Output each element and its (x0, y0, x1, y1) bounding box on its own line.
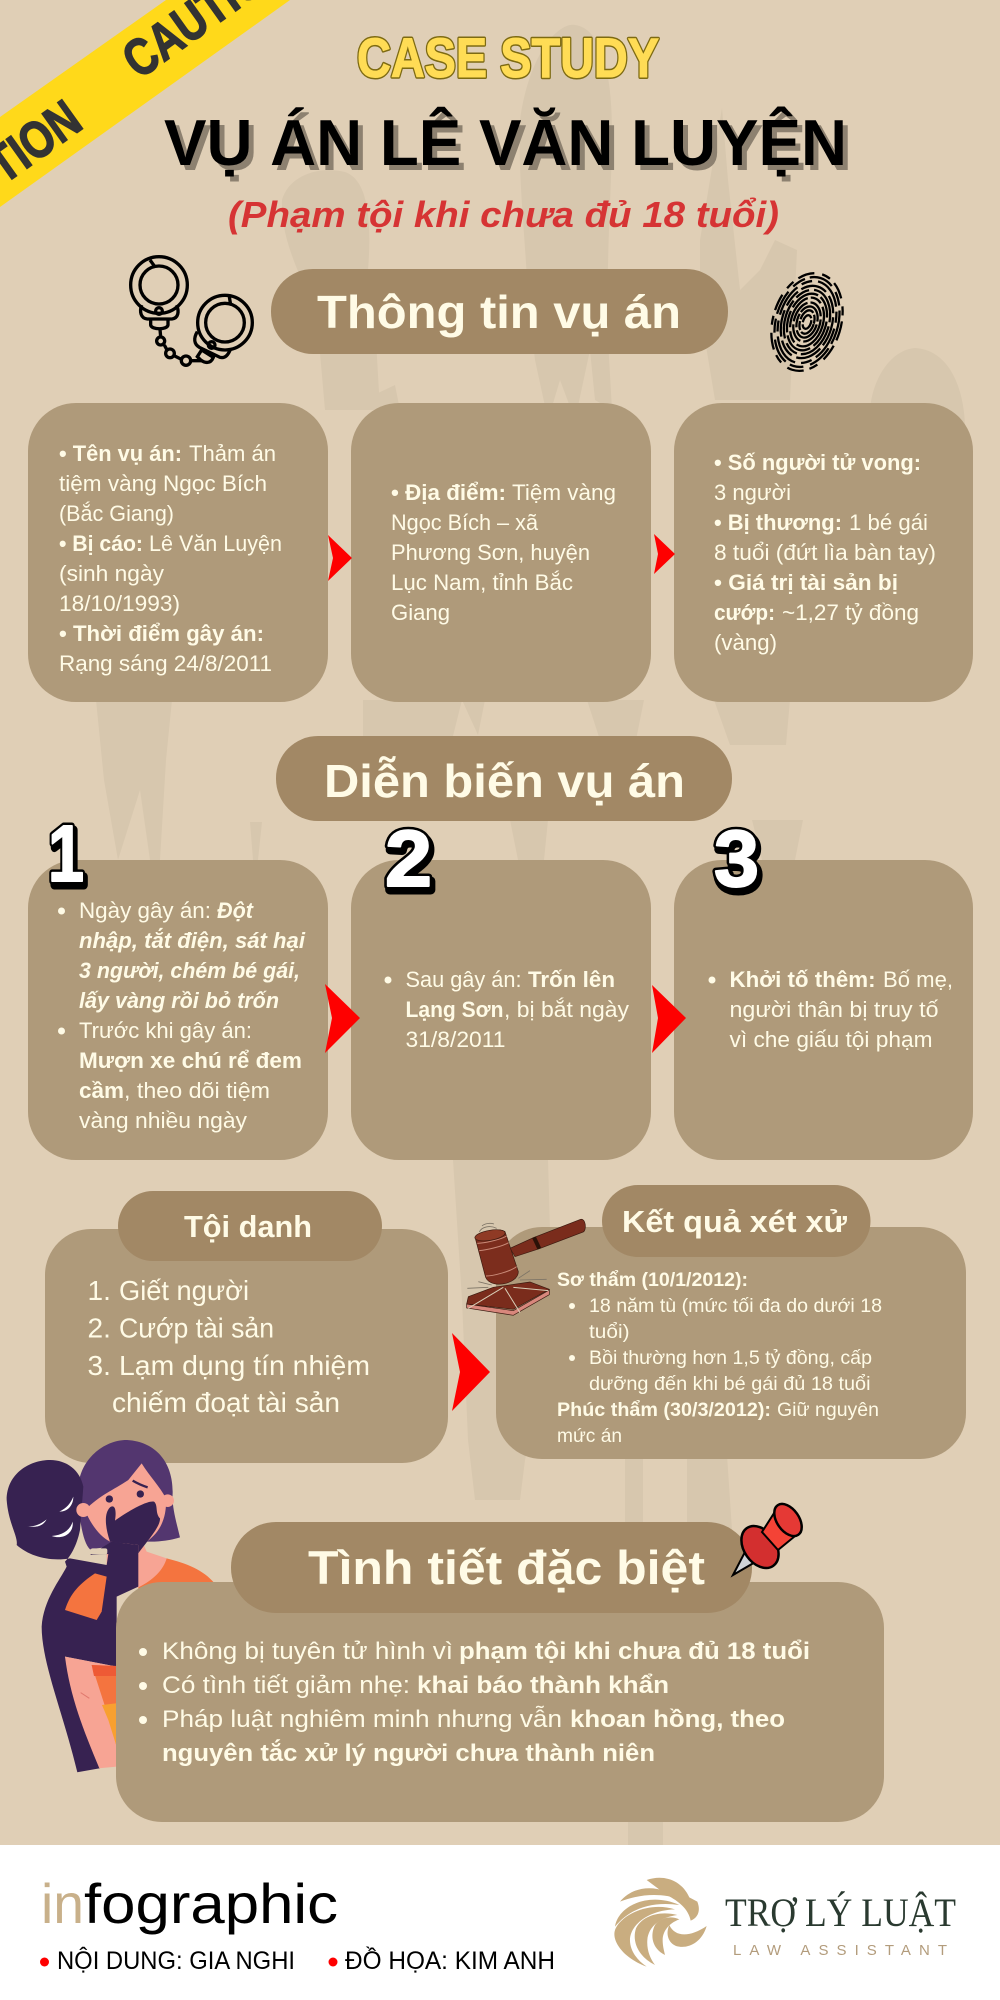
heading and panel: special circumstances: Có tình tiết giảm nhẹ: (162, 1672, 410, 1699)
panel: casualties and property: cướp: (714, 600, 775, 625)
arrow: step 2 to 3 (652, 985, 686, 1053)
footer band (0, 1845, 1000, 2000)
panel: step 1: lấy vàng rồi bỏ trốn (79, 988, 279, 1013)
panel: casualties and property: 1 bé gái (849, 510, 928, 535)
panel: step 3: vì che giấu tội phạm (730, 1027, 932, 1052)
footer: infographic wordmark: fographic (84, 1872, 338, 1935)
logo: wordmark: TRỢ LÝ LUẬT (725, 1890, 956, 1935)
panel: case name, defendant, time: Thảm án (189, 441, 276, 466)
heading and panel: special circumstances: khoan hồng, theo (570, 1706, 785, 1733)
step number 3: 3 (714, 814, 759, 903)
arrow: charges to verdict (452, 1333, 490, 1411)
panel: location: • Địa điểm: (391, 480, 506, 505)
panel: casualties and property: 3 người (714, 480, 791, 505)
title: case study: CASE STUDY (357, 26, 659, 89)
arrow: step 1 to 2 (325, 984, 360, 1053)
panel: verdict: Giữ nguyên (777, 1399, 879, 1421)
panel: casualties and property: 8 tuổi (đứt lìa bàn tay) (714, 540, 936, 565)
caution tape (0, 0, 301, 247)
step number 3: 3 (714, 814, 759, 903)
panel: verdict: dưỡng đến khi bé gái đủ 18 tuổi (589, 1373, 870, 1395)
logo: wordmark: LAW ASSISTANT (733, 1942, 947, 1959)
panel: case name, defendant, time: • Bị cáo: (59, 531, 143, 556)
panel: case name, defendant, time: Lê Văn Luyện (149, 531, 282, 556)
heading and panel: special circumstances: Tình tiết đặc biệt (308, 1541, 705, 1594)
panel: step 2: , bị bắt ngày (504, 997, 630, 1022)
panel: step 1: Ngày gây án: (79, 898, 211, 923)
panel: step 1: , theo dõi tiệm (124, 1078, 270, 1103)
panel: verdict (496, 1185, 966, 1459)
panel: step 3: người thân bị truy tố (730, 997, 939, 1022)
arrow: info 2 to 3 (654, 534, 675, 574)
panel: step 2: 31/8/2011 (406, 1027, 506, 1052)
footer: content credit: NỘI DUNG: GIA NGHI (57, 1946, 295, 1975)
panel: verdict: mức án (557, 1425, 622, 1447)
heading: thông tin vụ án: Thông tin vụ án (317, 286, 681, 338)
panel: charges (45, 1191, 448, 1463)
step number 2: 2 (385, 814, 432, 903)
panel: location (351, 403, 651, 702)
step number 1: 1 (48, 809, 84, 898)
footer: infographic wordmark: in (41, 1872, 84, 1935)
step number 2: 2 (385, 814, 432, 903)
icon: handcuffs (131, 257, 252, 365)
panel: step 2: Trốn lên (528, 967, 615, 992)
panel: step 1: nhập, tắt điện, sát hại (79, 928, 306, 953)
panel: case name, defendant, time: (Bắc Giang) (59, 501, 174, 526)
panel: step 1: Mượn xe chú rể đem (79, 1048, 302, 1073)
footer: design credit: ĐỒ HỌA: KIM ANH (345, 1945, 555, 1975)
panel: casualties and property: ~1,27 tỷ đồng (782, 600, 919, 625)
step number 1: 1 (48, 809, 84, 898)
title: case study: CASE STUDY (357, 26, 659, 89)
panel: case name, defendant, time: • Thời điểm gây án: (59, 621, 264, 646)
panel: verdict: 18 năm tù (mức tối đa do dưới 18 (589, 1295, 882, 1317)
panel: step 2: Sau gây án: (406, 967, 522, 992)
panel: verdict: Kết quả xét xử (622, 1204, 848, 1239)
panel: charges: Giết người (119, 1275, 249, 1306)
heading and panel: special circumstances: khai báo thành khẩn (417, 1672, 669, 1699)
panel: step 1 (28, 860, 328, 1160)
step number 3: 3 (716, 818, 761, 907)
panel: casualties and property: • Số người tử vong: (714, 450, 921, 475)
heading and panel: special circumstances: Pháp luật nghiêm minh nhưng vẫn (162, 1706, 562, 1733)
panel: verdict: Sơ thẩm (10/1/2012): (557, 1269, 748, 1291)
illustration: victim and attacker (7, 1440, 214, 1772)
panel: charges: 3. (88, 1350, 111, 1381)
panel: charges: Cướp tài sản (119, 1312, 274, 1344)
panel: verdict: Bồi thường hơn 1,5 tỷ đồng, cấp (589, 1347, 872, 1369)
panel: step 3: Khởi tố thêm: (730, 967, 876, 992)
heading and panel: special circumstances: phạm tội khi chưa đủ 18 tuổi (459, 1638, 810, 1665)
heading: thông tin vụ án (271, 269, 728, 354)
panel: casualties and property (674, 403, 973, 702)
icon: fingerprint (760, 264, 854, 380)
panel: location: Giang (391, 600, 450, 625)
panel: step 3 (674, 860, 973, 1160)
panel: step 3: Bố mẹ, (883, 967, 953, 992)
panel: step 1: cầm (79, 1078, 124, 1103)
heading: diễn biến vụ án: Diễn biến vụ án (324, 755, 685, 807)
logo: wordmark (725, 1890, 956, 1959)
panel: charges: 2. (88, 1312, 111, 1344)
panel: case name, defendant, time: Rạng sáng 24/8/2011 (59, 651, 272, 676)
panel: case name, defendant, time: tiệm vàng Ngọc Bích (59, 471, 267, 496)
panel: case name, defendant, time: • Tên vụ án: (59, 441, 182, 466)
step number 1: 1 (50, 813, 86, 902)
heading and panel: special circumstances (116, 1522, 884, 1822)
panel: location: Tiệm vàng (512, 480, 616, 505)
heading and panel: special circumstances: Không bị tuyên tử hình vì (162, 1638, 453, 1665)
panel: charges: 1. (88, 1275, 111, 1306)
panel: step 1: 3 người, chém bé gái, (79, 958, 300, 983)
step number 2: 2 (387, 818, 434, 907)
icon: push pin (733, 1499, 807, 1575)
panel: location: Ngọc Bích – xã (391, 510, 538, 535)
title: vụ án lê văn luyện: VỤ ÁN LÊ VĂN LUYỆN (169, 111, 852, 184)
panel: verdict: tuổi) (589, 1321, 630, 1343)
panel: casualties and property: (vàng) (714, 630, 777, 655)
panel: verdict: Phúc thẩm (30/3/2012): (557, 1399, 771, 1421)
heading and panel: special circumstances: nguyên tắc xử lý người chưa thành niên (162, 1739, 655, 1767)
panel: casualties and property: • Giá trị tài sản bị (714, 570, 898, 595)
panel: step 1: Trước khi gây án: (79, 1018, 252, 1043)
panel: location: Lục Nam, tỉnh Bắc (391, 570, 573, 595)
panel: step 2 (351, 860, 651, 1160)
panel: case name, defendant, time: 18/10/1993) (59, 591, 180, 616)
panel: step 2: Lạng Sơn (406, 997, 504, 1022)
panel: charges: chiếm đoạt tài sản (112, 1387, 340, 1418)
panel: step 1: vàng nhiều ngày (79, 1108, 248, 1133)
panel: location: Phương Sơn, huyện (391, 540, 590, 565)
subtitle: (Phạm tội khi chưa đủ 18 tuổi) (228, 194, 779, 235)
panel: step 1: Đột (217, 898, 254, 923)
panel: case name, defendant, time: (sinh ngày (59, 561, 165, 586)
title: vụ án lê văn luyện: VỤ ÁN LÊ VĂN LUYỆN (164, 106, 847, 179)
panel: casualties and property: • Bị thương: (714, 510, 842, 535)
icon: gavel (467, 1219, 585, 1315)
background: faint blood drips (96, 25, 965, 1846)
heading: diễn biến vụ án (276, 736, 732, 821)
panel: charges: Lạm dụng tín nhiệm (119, 1350, 370, 1381)
panel: case name, defendant, time (28, 403, 328, 702)
logo: eagle (614, 1878, 707, 1967)
panel: charges: Tội danh (184, 1209, 312, 1244)
arrow: info 1 to 2 (328, 535, 352, 581)
